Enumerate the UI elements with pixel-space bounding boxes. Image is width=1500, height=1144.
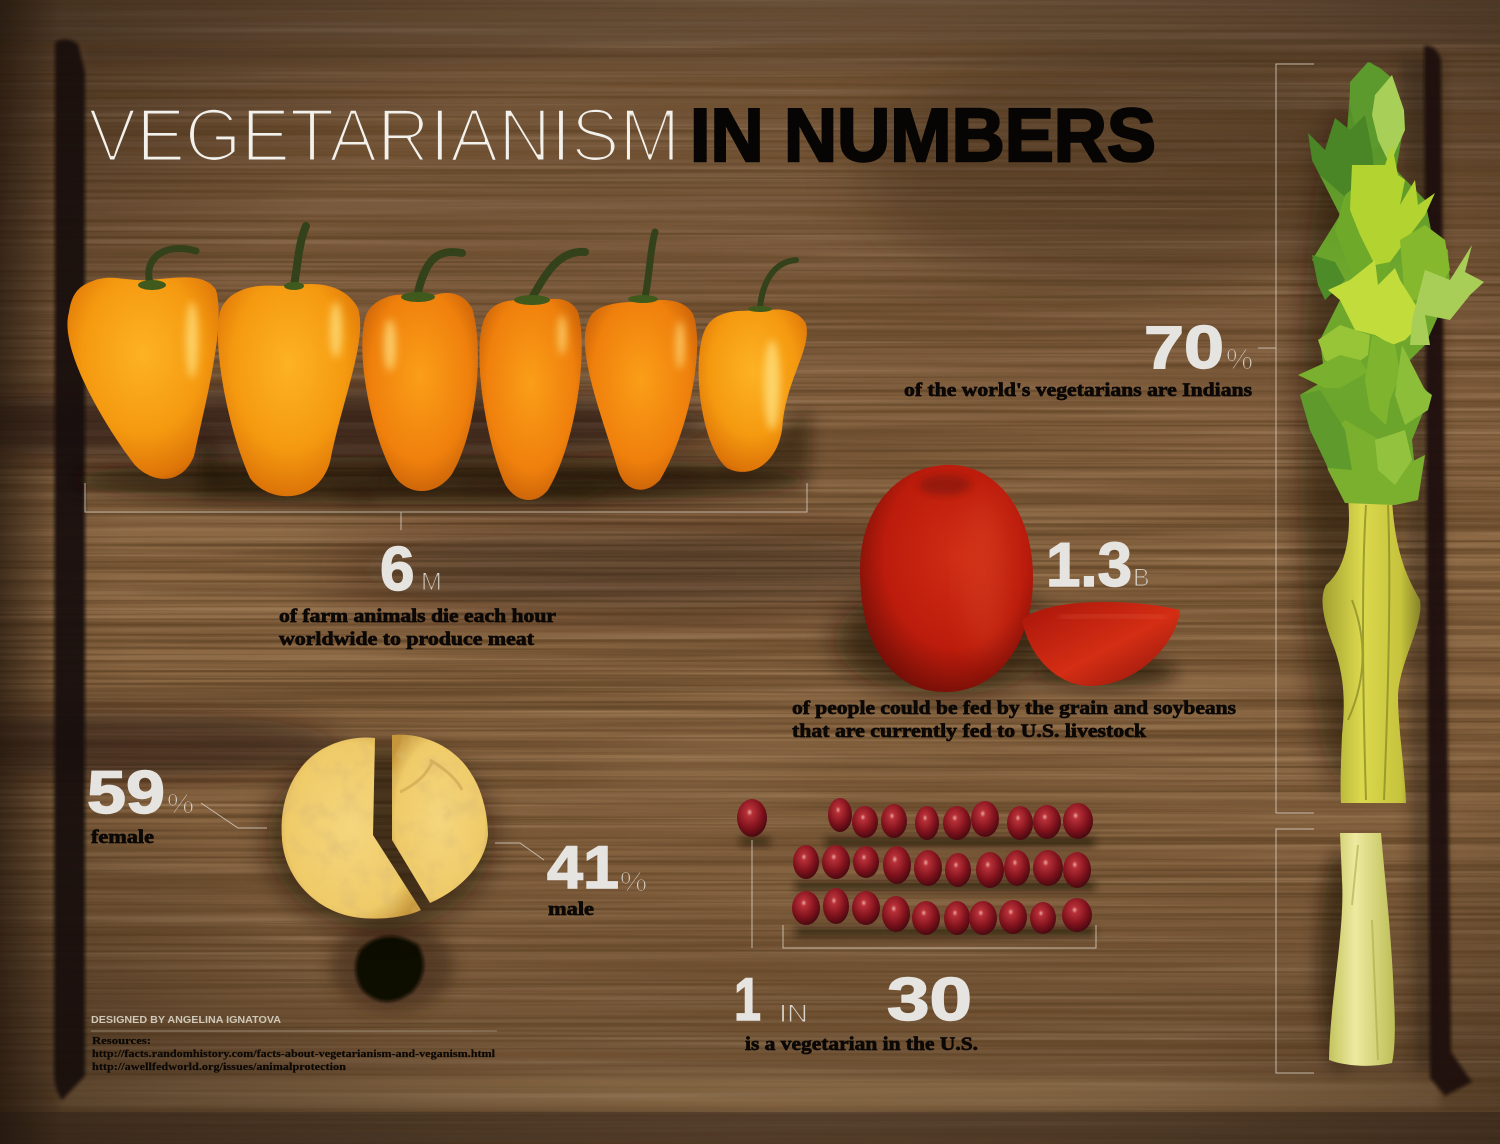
wood knot — [330, 920, 454, 1012]
credits and resources: DESIGNED BY ANGELINA IGNATOVA — [91, 1014, 281, 1026]
illustration: tomato and wedge — [835, 465, 1180, 695]
stat: 6M farm animals: worldwide to produce meat — [279, 629, 535, 650]
stat: 41% male: male — [548, 899, 594, 920]
stat: 1 in 30: IN — [779, 1000, 808, 1028]
leader line 41% — [495, 843, 544, 860]
illustration: celery stalk, lower part — [1318, 833, 1395, 1070]
stat: 6M farm animals: of farm animals die each hour — [279, 606, 557, 627]
illustration: celery stalk, upper part — [1298, 62, 1484, 803]
stat: 1.3B people: B — [1133, 564, 1150, 592]
stat: 59% female: 59 — [87, 759, 165, 826]
stat: 1 in 30 — [734, 966, 978, 1055]
celery leaves — [1298, 62, 1484, 505]
stat: 70% Indians — [904, 314, 1253, 401]
stat: 1.3B people: 1.3 — [1046, 531, 1132, 600]
illustration: six orange peppers — [67, 226, 810, 504]
illustration: sweet potato slice pie — [268, 735, 492, 930]
shadow under pomegranate seeds — [740, 838, 1095, 936]
pepper 2 — [218, 284, 360, 496]
pepper stems — [149, 226, 796, 308]
stat: 70% Indians: of the world's vegetarians are Indians — [904, 380, 1252, 401]
pepper calyxes — [138, 280, 772, 312]
stat: 6M farm animals — [279, 535, 557, 650]
stat: 1.3B people: of people could be fed by the grain and soybeans — [792, 698, 1236, 719]
stat: 1 in 30: 1 — [734, 966, 761, 1033]
stat: 6M farm animals: 6 — [380, 535, 414, 604]
title: VEGETARIANISM — [88, 93, 680, 177]
illustration: pomegranate seeds, 1 in 30 — [737, 798, 1093, 935]
credits and resources: Resources: — [92, 1036, 151, 1047]
credits and resources — [91, 1014, 497, 1073]
pepper highlights — [186, 302, 780, 430]
stat: 1.3B people — [792, 531, 1236, 742]
title — [88, 93, 1156, 177]
stat: 1 in 30: 30 — [887, 966, 972, 1033]
stat: 1 in 30: is a vegetarian in the U.S. — [745, 1034, 978, 1055]
leader line 59% — [201, 803, 267, 828]
brackets around seeds — [752, 840, 1096, 948]
pepper 5 — [585, 300, 697, 490]
stat: 59% female: female — [91, 827, 154, 848]
stat: 70% Indians: % — [1226, 344, 1253, 376]
pepper 4 — [479, 299, 582, 500]
stat: 1.3B people: that are currently fed to U.S. livestock — [792, 721, 1146, 742]
stat: 41% male — [547, 834, 647, 920]
stat: 70% Indians: 70 — [1144, 314, 1224, 381]
pepper 3 — [362, 293, 478, 491]
stat: 41% male: 41 — [547, 834, 619, 901]
stat: 59% female — [87, 759, 194, 848]
stat: 59% female: % — [167, 788, 194, 819]
bracket under peppers — [85, 483, 807, 530]
pepper 6 — [699, 310, 807, 472]
pepper 1 — [67, 277, 219, 479]
credits and resources: http://facts.randomhistory.com/facts-about-vegetarianism-and-veganism.html — [92, 1049, 495, 1060]
stat: 6M farm animals: M — [421, 568, 442, 596]
title: IN NUMBERS — [690, 93, 1156, 177]
credits and resources: http://awellfedworld.org/issues/animalprotection — [92, 1062, 346, 1073]
brackets around celery — [1258, 64, 1314, 1073]
stalk ribs — [1348, 505, 1389, 800]
stat: 41% male: % — [620, 866, 647, 897]
